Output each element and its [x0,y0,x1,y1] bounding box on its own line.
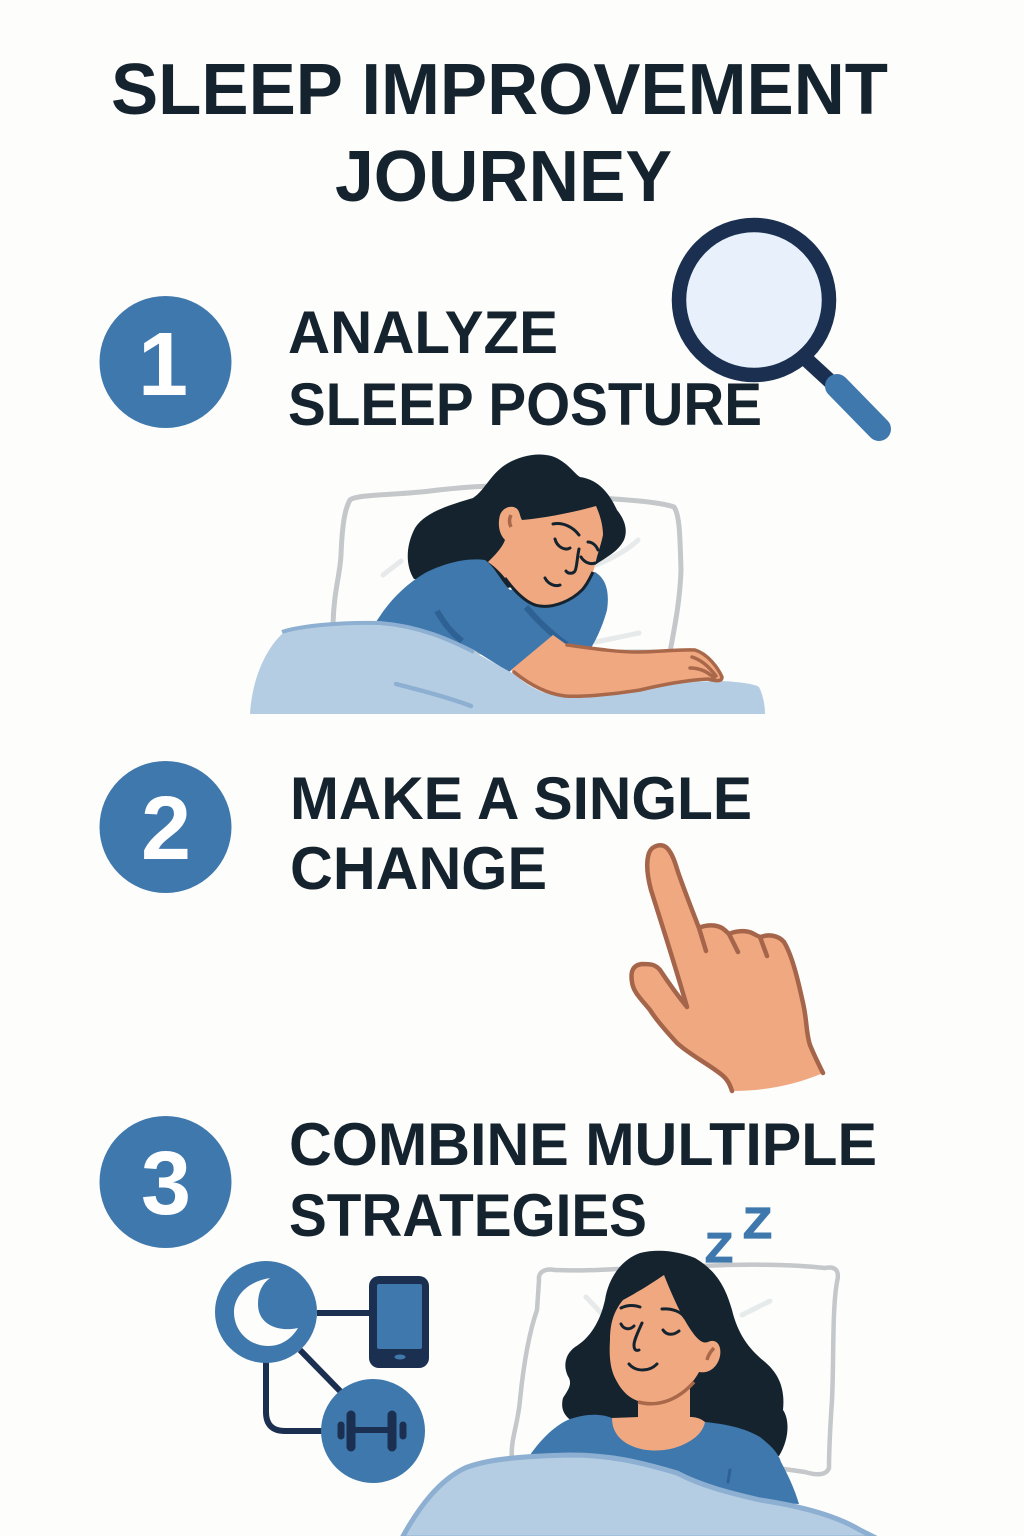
step 2 heading: CHANGE [290,835,547,902]
step 3 heading: STRATEGIES [289,1182,647,1249]
title [111,50,888,217]
step 3 number badge [100,1116,232,1248]
step 1 heading: ANALYZE [288,299,558,366]
neck shadow line [505,572,593,606]
shirt [528,1415,799,1504]
chin shadow and inner ear [638,1348,714,1404]
hair [408,455,626,590]
diagram: connected strategies [215,1261,429,1483]
icon: smartphone [369,1276,429,1368]
pillow creases [383,540,639,642]
hair [562,1251,788,1456]
icon: magnifying glass [679,225,879,429]
sleeping Z letters: Z [705,1224,733,1271]
face [610,1275,720,1403]
connector lines [266,1313,372,1431]
illustration: woman sleeping on her back [402,1199,876,1536]
shirt fold [437,607,567,645]
blanket [402,1455,876,1536]
step 2 heading [290,765,752,902]
arm [511,635,722,696]
blanket top edge [282,623,474,652]
face [488,506,603,606]
step 3 number badge: 3 [141,1134,191,1234]
step 2 heading: MAKE A SINGLE [290,765,752,832]
title: SLEEP IMPROVEMENT [111,50,888,130]
illustration: woman sleeping on her side [250,455,765,714]
step 1 heading [288,299,762,438]
icon: pointing hand [631,845,823,1091]
closed eyes, brows, nose and smile [621,1306,685,1370]
pillow [333,486,681,652]
pillow creases [586,1297,770,1316]
title: JOURNEY [335,137,672,217]
step 2 number badge: 2 [141,779,191,879]
step 1 heading: SLEEP POSTURE [288,371,762,438]
step 2 number badge [100,761,232,893]
inner ear [510,515,511,527]
pillow [512,1265,838,1474]
blanket [250,623,765,714]
icon: moon [215,1261,317,1363]
step 1 number badge: 1 [138,315,188,415]
arm outline and fingers [514,645,722,696]
closed eyes, brow, nose and smile [545,524,598,586]
neck and chest [612,1385,705,1450]
shirt [376,559,608,672]
icon: dumbbell [321,1379,425,1483]
sleeping Z letters: Z [743,1199,772,1248]
shirt fold [728,1470,730,1482]
sleeping Z letters [705,1199,772,1271]
blanket fold [396,684,471,706]
step 3 heading: COMBINE MULTIPLE [289,1111,877,1178]
step 3 heading [289,1111,877,1249]
step 1 number badge [100,296,232,428]
